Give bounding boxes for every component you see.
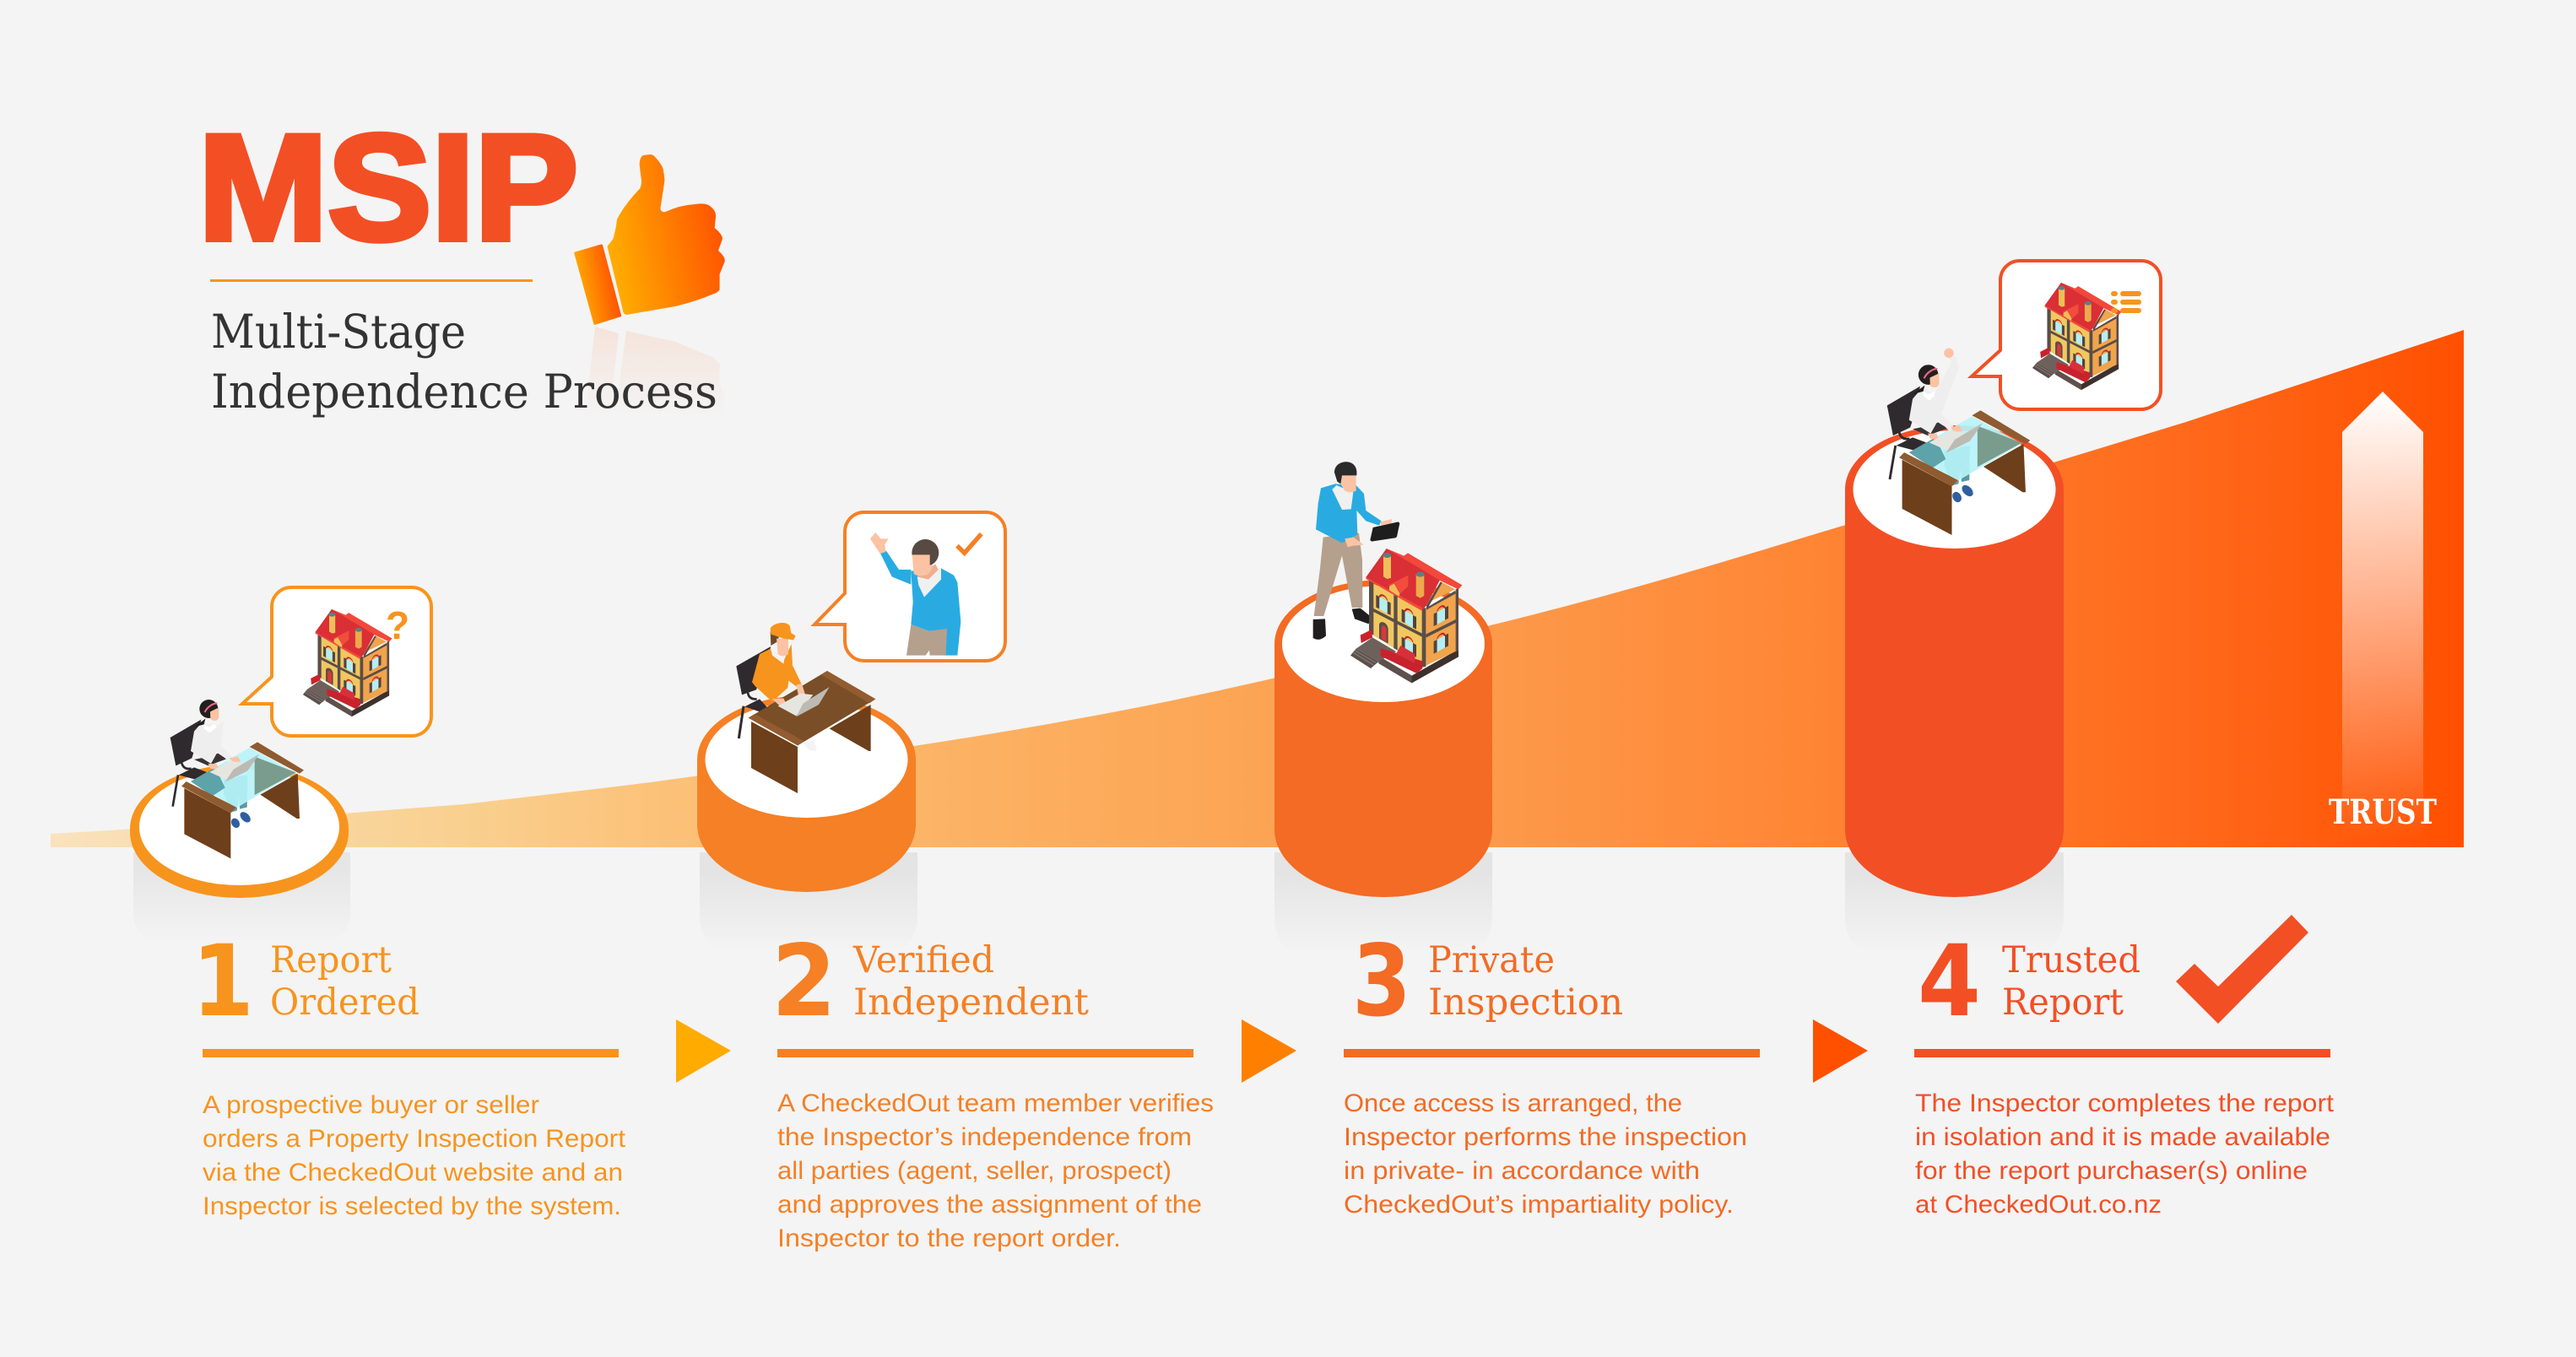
trust wedge (51, 330, 2464, 847)
body text 2: Inspector to the report order. (777, 1225, 1121, 1252)
number 3: 3 (1352, 923, 1411, 1039)
icon: house with list (2032, 283, 2141, 390)
icon: house with question mark: ? (386, 603, 409, 647)
number 2: 2 (771, 923, 836, 1039)
rule 3 (1344, 1049, 1760, 1057)
title: MSIP (198, 103, 578, 272)
body text 1: via the CheckedOut website and an (203, 1159, 623, 1187)
heading: Report Ordered: Report (270, 939, 392, 981)
heading: Private Inspection: Private (1428, 939, 1555, 981)
cylinder 1 (130, 765, 349, 898)
cylinder 4 (1845, 425, 2064, 897)
body text 4: for the report purchaser(s) online (1915, 1157, 2308, 1185)
trust arrow (2342, 392, 2423, 841)
speech bubble 1 (242, 587, 431, 736)
arrow 1 (676, 1019, 731, 1083)
heading: Report Ordered: Ordered (270, 981, 419, 1024)
cylinder 3 (1274, 580, 1492, 897)
body text 1: Inspector is selected by the system. (203, 1192, 621, 1220)
body text 2: the Inspector’s independence from (777, 1123, 1192, 1151)
heading: Trusted Report: Trusted (2002, 939, 2140, 981)
heading: Verified Independent: Verified (852, 939, 994, 981)
rule 1 (203, 1049, 619, 1057)
arrow 3 (1813, 1019, 1868, 1083)
number 1: 1 (192, 923, 254, 1039)
body text 2: A CheckedOut team member verifies (777, 1089, 1214, 1117)
rule 4 (1914, 1049, 2330, 1057)
body text 2: and approves the assignment of the (777, 1191, 1202, 1219)
cylinder shadows (133, 852, 2064, 954)
heading: Trusted Report: Report (2002, 981, 2124, 1024)
body text 3: Inspector performs the inspection (1344, 1123, 1747, 1151)
icon: house with question mark (303, 603, 409, 716)
rule 2 (777, 1049, 1193, 1057)
heading: Verified Independent: Independent (853, 981, 1089, 1024)
body text 3: in private- in accordance with (1344, 1157, 1700, 1185)
step 4 (1914, 915, 2335, 1219)
body text 2: all parties (agent, seller, prospect) (777, 1157, 1172, 1185)
body text 3: Once access is arranged, the (1344, 1089, 1682, 1117)
thumb reflection (585, 327, 724, 419)
step 3 (1344, 923, 1760, 1219)
icon: large check mark (2176, 915, 2308, 1024)
body text 1: A prospective buyer or seller (203, 1091, 539, 1119)
title block: MSIP (198, 103, 717, 419)
speech bubble 2 (814, 512, 1005, 661)
body text 1: orders a Property Inspection Report (203, 1125, 626, 1153)
figure: woman waving at glass desk, step 4 (1887, 349, 2030, 535)
figure: man in orange at wooden desk, step 2 (736, 623, 875, 793)
body text 4: in isolation and it is made available (1915, 1123, 2330, 1151)
arrow 2 (1242, 1019, 1296, 1083)
body text 3: CheckedOut’s impartiality policy. (1344, 1191, 1734, 1219)
title rule (210, 279, 533, 282)
speech bubble 4 (1972, 261, 2161, 409)
trust label: TRUST (2329, 792, 2437, 832)
subtitle: Multi-Stage (211, 305, 466, 359)
icon: thumbs up (576, 154, 725, 419)
number 4: 4 (1918, 923, 1981, 1039)
body text 4: The Inspector completes the report (1915, 1089, 2335, 1117)
step 1 (192, 923, 626, 1220)
figure: woman at glass desk, step 1 (170, 700, 304, 858)
icon: man waving with check (870, 533, 982, 656)
subtitle: Independence Process (211, 365, 717, 419)
step 2 (771, 923, 1214, 1252)
cylinder 2 (697, 695, 916, 892)
body text 4: at CheckedOut.co.nz (1915, 1191, 2162, 1219)
heading: Private Inspection: Inspection (1428, 981, 1623, 1024)
figure: inspector with tablet and house, step 3 (1313, 462, 1462, 683)
